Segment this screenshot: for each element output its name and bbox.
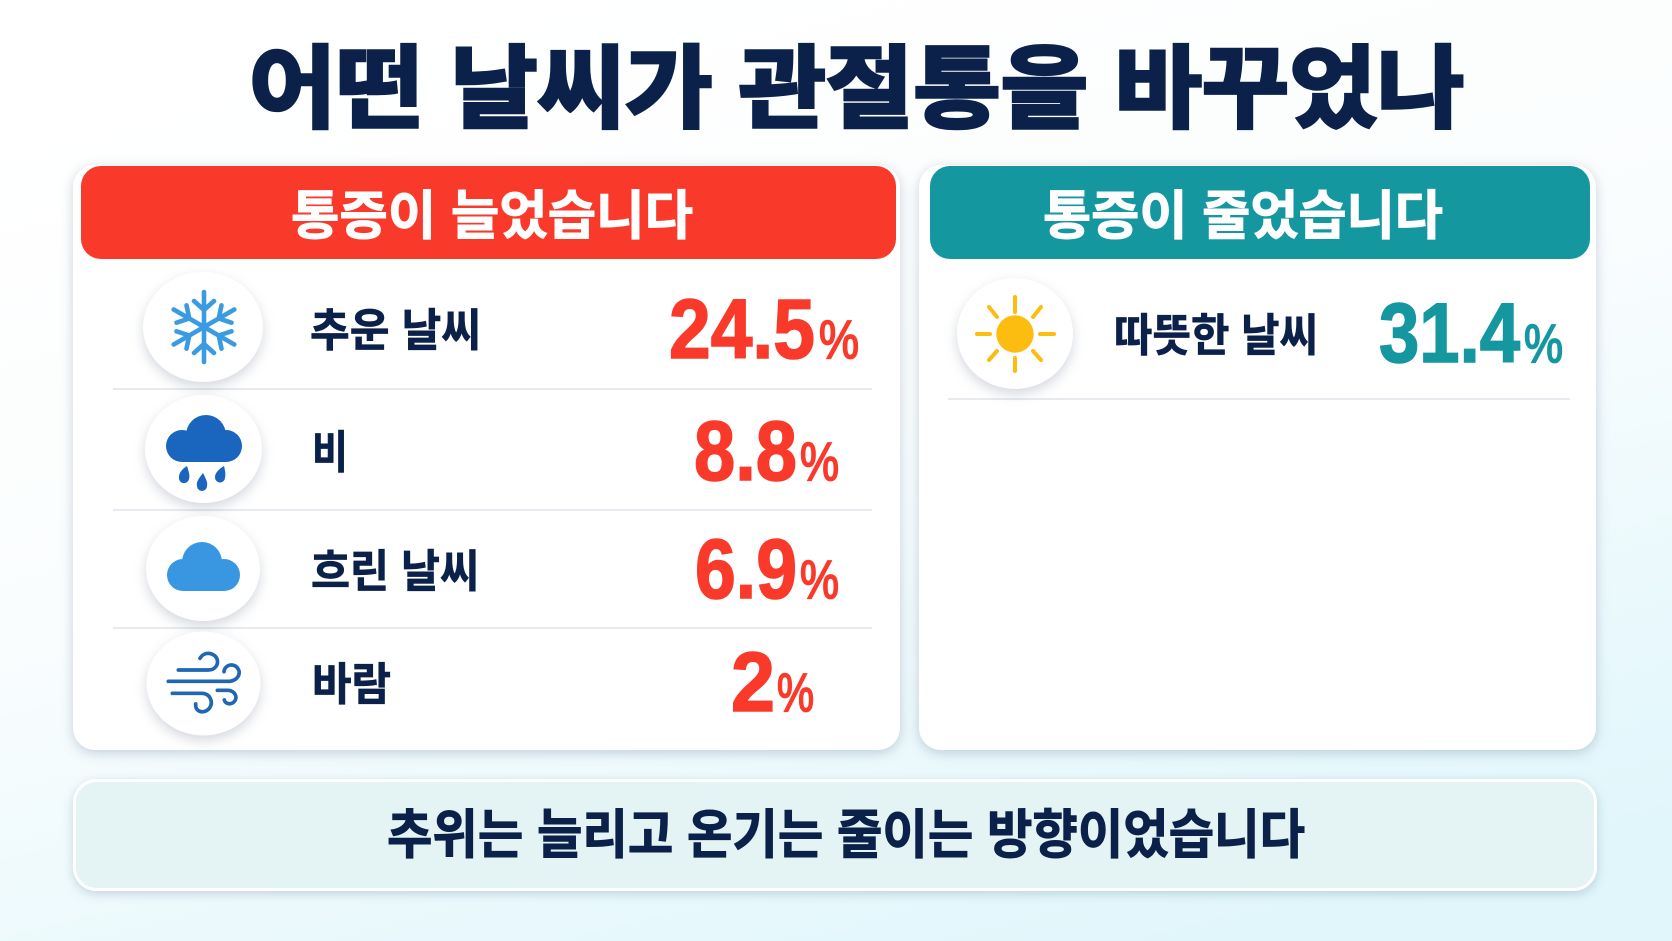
value: 24.5%: %	[819, 310, 859, 370]
callout: conclusion	[74, 780, 1596, 890]
label: cloudy weather: 흐린 날씨	[311, 546, 479, 597]
value: 6.9%: %	[800, 550, 839, 610]
icon: wind	[146, 632, 260, 736]
header: pain decreased	[930, 166, 1590, 259]
panel: pain increased	[73, 165, 900, 750]
icon: cloud	[146, 516, 260, 621]
value: 2%: 2	[731, 635, 775, 729]
panel: pain decreased	[919, 165, 1596, 750]
value: 8.8%: 8.8	[694, 404, 797, 498]
value: 2%: %	[777, 663, 814, 723]
callout: conclusion: 추위는 늘리고 온기는 줄이는 방향이었습니다	[387, 806, 1305, 865]
header: pain increased: 통증이 늘었습니다	[291, 187, 693, 246]
value: 8.8%: %	[800, 432, 839, 492]
header: pain increased	[81, 166, 896, 259]
icon: snowflake	[143, 272, 263, 382]
label: cold weather: 추운 날씨	[310, 305, 481, 356]
label: warm weather: 따뜻한 날씨	[1114, 310, 1318, 361]
label: rain: 비	[312, 427, 348, 478]
value: 6.9%: 6.9	[695, 522, 797, 616]
icon: rain cloud	[145, 395, 262, 503]
value: 31.4%: %	[1524, 314, 1563, 374]
label: wind: 바람	[312, 659, 391, 710]
icon: sun	[957, 278, 1073, 389]
header: pain decreased: 통증이 줄었습니다	[1043, 187, 1443, 246]
value: 31.4%: 31.4	[1379, 286, 1520, 380]
value: 2%	[731, 635, 814, 729]
title: 어떤 날씨가 관절통을 바꾸었나	[249, 40, 1464, 140]
value: 24.5%: 24.5	[669, 282, 815, 376]
